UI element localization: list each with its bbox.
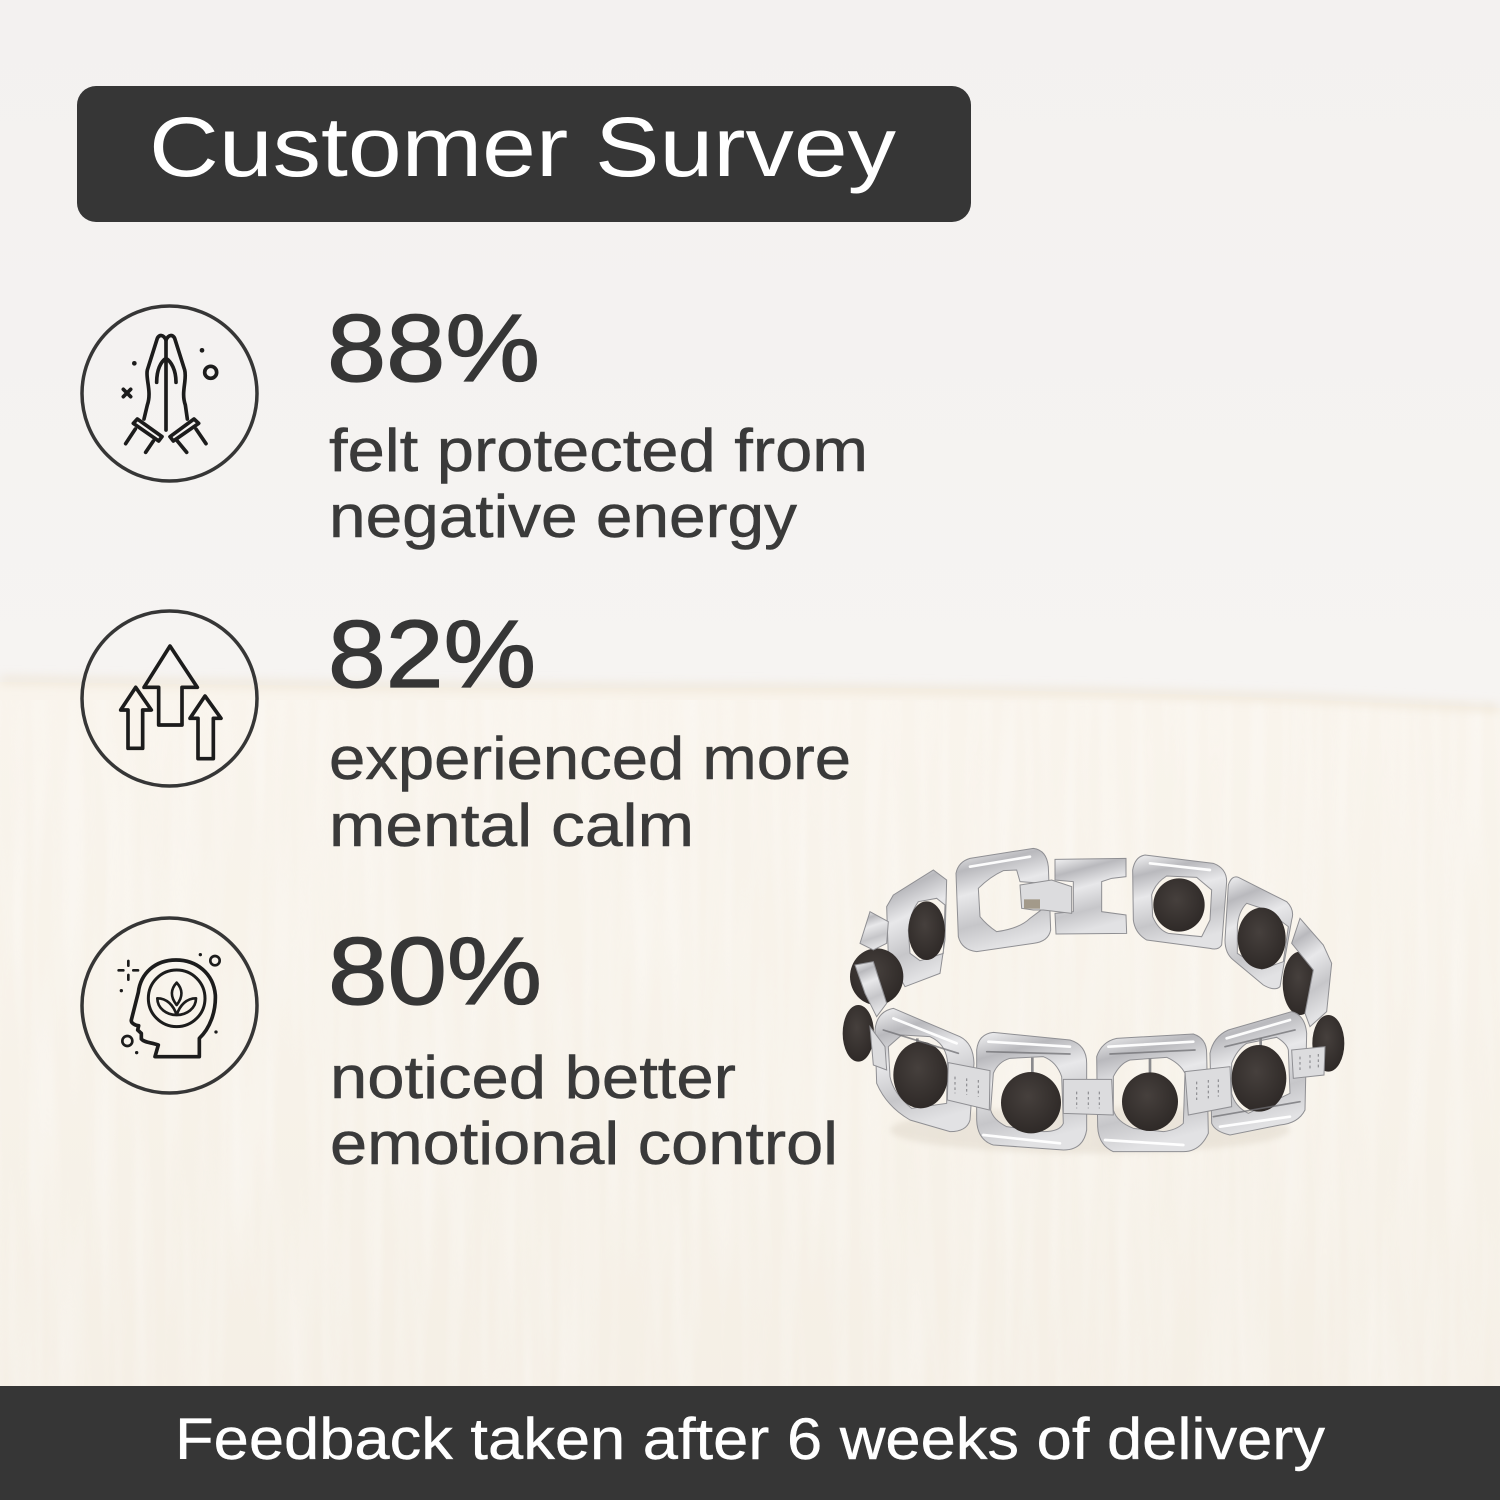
- icon: head with lotus: [82, 918, 257, 1093]
- description: mental calm: [329, 725, 851, 859]
- side links: [855, 912, 1332, 1027]
- description: emotional control: noticed better: [330, 1044, 736, 1111]
- description: mental calm: mental calm: [329, 792, 694, 859]
- bracelet photo illustration: [843, 848, 1344, 1153]
- title banner: [77, 86, 971, 222]
- description: mental calm: experienced more: [329, 725, 851, 792]
- icon: rising arrows: [82, 611, 257, 786]
- description: felt protected: negative energy: [329, 483, 797, 550]
- icon: praying hands: [82, 306, 257, 481]
- stat: 82% mental calm: [82, 601, 851, 859]
- description: felt protected: [329, 417, 868, 550]
- back beads: [850, 878, 1317, 1015]
- front connector dots: [955, 1054, 1318, 1108]
- footer band: Feedback taken after 6 weeks of delivery: [175, 1407, 1325, 1472]
- description: felt protected: felt protected from: [329, 417, 868, 484]
- front connector bars: [870, 1027, 1325, 1115]
- link highlights: [893, 857, 1290, 1145]
- figure: 88%: 88%: [327, 295, 540, 402]
- clasp hinge: [1020, 880, 1072, 913]
- figure: 80%: 80%: [328, 918, 542, 1025]
- stat: 80% emotional control: [82, 918, 838, 1177]
- end beads behind links: [843, 1005, 1344, 1072]
- description: emotional control: emotional control: [330, 1110, 838, 1177]
- link dark reflections: [883, 1030, 1300, 1117]
- pins: [917, 1038, 1261, 1077]
- back links: [887, 848, 1293, 989]
- stat: 88% felt protected: [82, 295, 868, 550]
- description: emotional control: [330, 1044, 838, 1177]
- footer band: [0, 1386, 1500, 1500]
- front links: [875, 1008, 1307, 1152]
- front beads: [893, 1042, 1286, 1133]
- figure: 82%: 82%: [328, 601, 536, 708]
- title banner: Customer Survey: [149, 100, 896, 194]
